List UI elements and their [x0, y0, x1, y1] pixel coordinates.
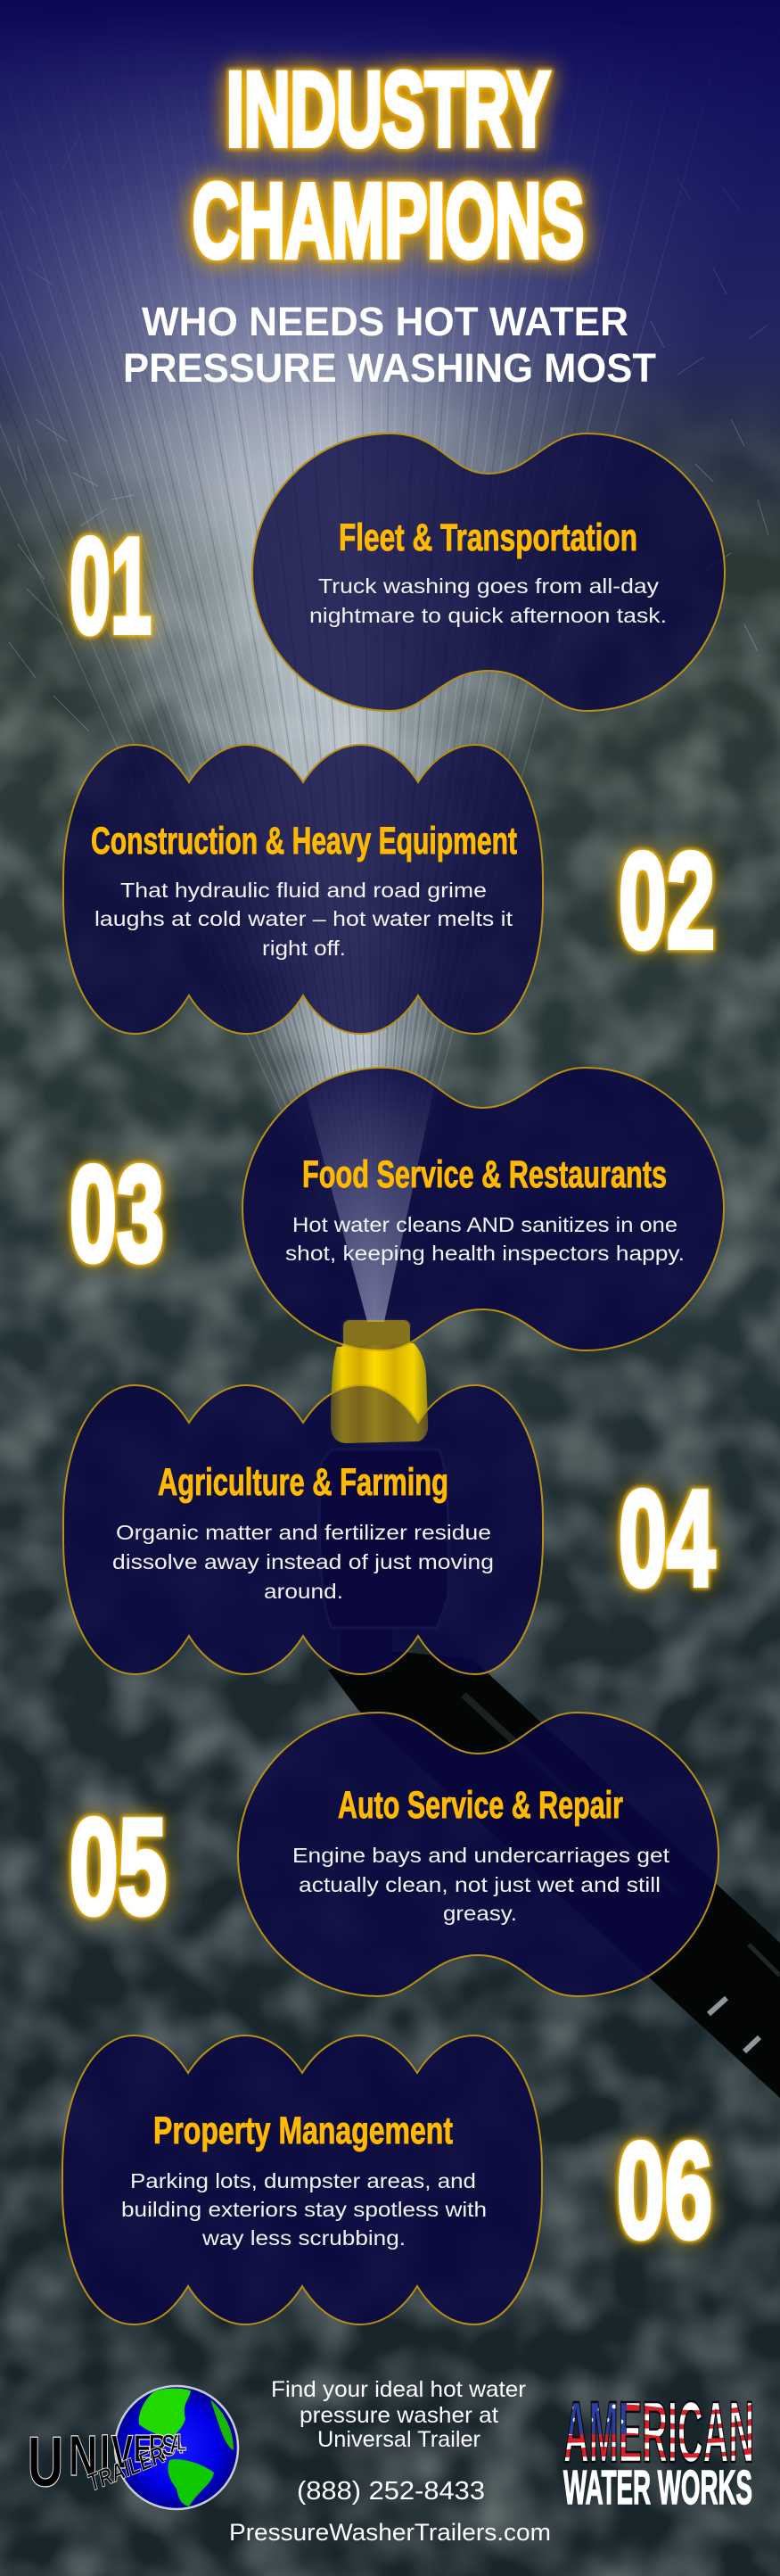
Universal wordmark: V: [111, 2425, 134, 2479]
footer call to action: Universal Trailer: [317, 2427, 480, 2452]
logo: Universal Trailer: [28, 2386, 238, 2509]
water spray fan from nozzle: [0, 39, 664, 1268]
Universal wordmark: L: [177, 2430, 186, 2456]
subtitle: PRESSURE WASHING MOST: [123, 345, 656, 391]
Universal wordmark: N: [69, 2423, 97, 2488]
text: auto service and repair: Engine bays and undercarriages get: [292, 1844, 670, 1867]
text: fleet and transportation: nightmare to quick afternoon task.: [309, 604, 667, 627]
number 01: 01: [70, 510, 152, 662]
text: property management: building exteriors stay spotless with: [121, 2198, 487, 2221]
text: property management: Property Management: [153, 2110, 453, 2152]
title: INDUSTRY: [226, 51, 550, 169]
footer call to action: pressure washer at: [300, 2403, 498, 2428]
number 03: 03: [70, 1138, 164, 1290]
icon: globe: [115, 2386, 238, 2509]
panel: fleet and transportation shape: [252, 433, 725, 711]
text: agriculture and farming: around.: [264, 1580, 343, 1603]
number 02: 02: [619, 825, 715, 977]
logo: American Water Works: [563, 2383, 754, 2514]
Universal wordmark: R: [149, 2428, 167, 2467]
text: construction and heavy equipment: [91, 820, 517, 960]
text: food service and restaurants: [285, 1153, 685, 1265]
text: agriculture and farming: [112, 1461, 494, 1603]
number 04: 04: [619, 1463, 715, 1614]
subtitle: WHO NEEDS HOT WATER: [142, 299, 628, 344]
text: construction and heavy equipment: That hydraulic fluid and road grime: [120, 879, 487, 902]
text: fleet and transportation: [309, 516, 667, 627]
number 05: 05: [70, 1791, 167, 1943]
spray cone seen through food service panel: [299, 1068, 439, 1322]
text: agriculture and farming: Agriculture & Farming: [158, 1461, 448, 1504]
text: fleet and transportation: Fleet & Transportation: [339, 516, 637, 559]
footer call to action: [229, 2377, 551, 2546]
text: auto service and repair: Auto Service & Repair: [338, 1784, 623, 1827]
panel: agriculture shape: [63, 1385, 543, 1674]
text: construction and heavy equipment: Construction & Heavy Equipment: [91, 820, 517, 863]
text: food service and restaurants: shot, keeping health inspectors happy.: [285, 1242, 685, 1265]
panel: construction shape: [63, 745, 543, 1034]
text: property management: Parking lots, dumpster areas, and: [130, 2169, 476, 2192]
text: agriculture and farming: dissolve away instead of just moving: [112, 1550, 494, 1573]
text: property management: [121, 2110, 487, 2250]
Universal wordmark: U: [28, 2421, 63, 2501]
subtitle: [123, 299, 656, 391]
footer call to action: PressureWasherTrailers.com: [229, 2519, 551, 2546]
nozzle tinted through panels: [331, 1320, 428, 1443]
footer call to action: (888) 252-8433: [297, 2477, 485, 2506]
footer call to action: Find your ideal hot water: [271, 2377, 526, 2402]
text: auto service and repair: actually clean, not just wet and still: [299, 1873, 661, 1896]
text: auto service and repair: [292, 1784, 670, 1925]
number 06: 06: [617, 2115, 712, 2266]
Universal wordmark: E: [134, 2428, 152, 2471]
text: agriculture and farming: Organic matter and fertilizer residue: [116, 1521, 491, 1544]
text: construction and heavy equipment: right off.: [262, 937, 346, 960]
panel: property management shape: [62, 2035, 542, 2324]
text: fleet and transportation: Truck washing goes from all-day: [318, 574, 660, 598]
water spray streaks and scratches: [0, 134, 768, 1111]
nozzle and hose behind panels: [319, 1320, 780, 2098]
text: construction and heavy equipment: laughs at cold water – hot water melts it: [94, 907, 513, 930]
text: auto service and repair: greasy.: [443, 1902, 517, 1925]
Universal wordmark: A: [169, 2431, 184, 2459]
Trailer wordmark: TRAILER: [84, 2441, 168, 2497]
text: food service and restaurants: Hot water cleans AND sanitizes in one: [292, 1213, 677, 1236]
Universal wordmark: S: [161, 2429, 176, 2463]
Universal wordmark: I: [100, 2424, 110, 2482]
text: property management: way less scrubbing.: [201, 2226, 406, 2250]
panel: auto service shape: [238, 1713, 718, 1996]
title: [193, 51, 584, 280]
panel: food service shape: [242, 1068, 724, 1350]
